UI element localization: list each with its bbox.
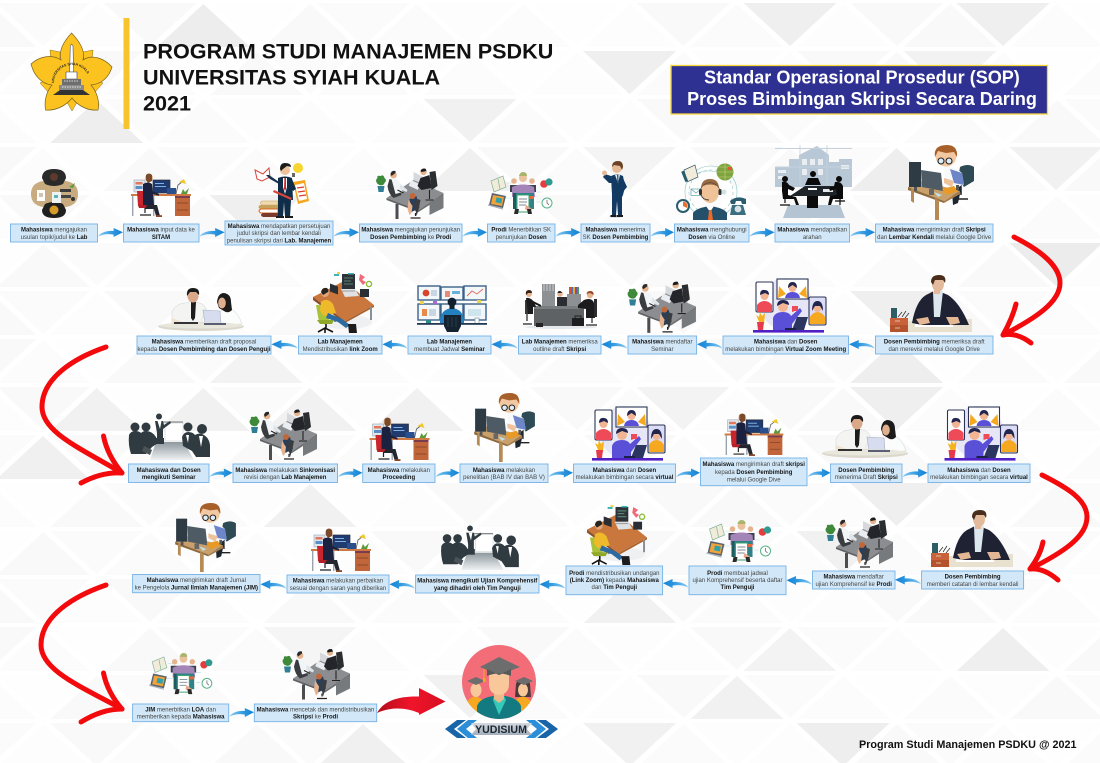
step: mengikuti seminar: Mahasiswa dan Dosen xyxy=(137,468,201,474)
step: cetak skripsi: Skripsi ke Prodi xyxy=(293,715,338,721)
step: daftar ujian: Mahasiswa mendaftar xyxy=(824,575,884,581)
arrow xyxy=(492,340,518,349)
red arrow: row 4 to row 5 xyxy=(41,585,122,722)
icon: isometric workstation xyxy=(313,272,374,333)
step: menghubungi xyxy=(674,224,749,242)
step: perbaikan: Mahasiswa melakukan perbaikan xyxy=(293,579,383,585)
step: memeriksa draft: Dosen Pembimbing memeriksa draft xyxy=(884,340,985,346)
step: sinkronisasi xyxy=(233,464,338,482)
arrow xyxy=(462,228,487,237)
icon: dosen writing xyxy=(890,275,972,332)
step: jurnal: ke Pengelola Jurnal Ilmiah Manajemen (JIM) xyxy=(135,585,258,591)
icon: student at desk xyxy=(311,528,371,572)
step: cetak skripsi xyxy=(254,704,377,722)
step: undangan: (Link Zoom) kepada Mahasiswa xyxy=(570,578,659,584)
icon: man with books xyxy=(255,163,309,218)
step: mendaftar seminar: Mahasiswa mendaftar xyxy=(632,340,692,346)
step: jadwal ujian: Tim Penguji xyxy=(721,585,755,591)
arrow xyxy=(849,340,875,349)
step: penelitian xyxy=(460,464,548,482)
icon: student at computer xyxy=(908,145,974,220)
logo: Universitas Syiah Kuala: UNIVERSITAS SYIAH KUALA xyxy=(52,62,89,83)
step: jadwal seminar xyxy=(408,336,491,354)
step: undangan xyxy=(566,566,663,595)
step: LOA: memberikan kepada Mahasiswa xyxy=(137,715,224,721)
icon: prodi document xyxy=(706,520,771,562)
step: sinkronisasi: revisi dengan Lab Manajemen xyxy=(244,475,326,481)
step: jadwal ujian xyxy=(689,566,786,595)
icon: virtual meeting xyxy=(753,278,826,333)
step: arahan xyxy=(775,224,850,242)
step: outline: Lab Manajemen memeriksa xyxy=(522,340,598,346)
arrow xyxy=(663,579,688,588)
step: menerima draft: menerima Draft Skripsi xyxy=(835,475,898,481)
step: mengajukan usulan: Mahasiswa mengajukan xyxy=(21,228,87,234)
icon: seminar silhouettes xyxy=(129,414,210,460)
step: kirim draft: dan Lembar Kendali melalui Google Drive xyxy=(877,235,991,241)
icon: virtual meeting xyxy=(592,406,665,461)
step: penelitian: Mahasiswa melakukan xyxy=(473,468,535,474)
title: PROGRAM STUDI MANAJEMEN PSDKU xyxy=(143,38,553,64)
arrow xyxy=(338,468,362,478)
step: input data: Mahasiswa input data ke xyxy=(127,228,195,234)
arrow xyxy=(334,228,359,237)
step: catatan: Dosen Pembimbing xyxy=(945,575,1001,581)
step: link zoom: Lab Manajemen xyxy=(318,340,363,346)
step: perbaikan: sesuai dengan saran yang diberikan xyxy=(290,586,386,592)
step: draft proposal: Mahasiswa memberikan draft proposal xyxy=(152,340,256,346)
step: virtual zoom: Mahasiswa dan Dosen xyxy=(754,340,817,346)
arrow xyxy=(272,340,298,349)
step: daftar ujian: ujian Komprehensif ke Prodi xyxy=(816,582,892,588)
SOP title banner: Proses Bimbingan Skripsi Secara Daring xyxy=(687,89,1037,109)
icon: seminar silhouettes xyxy=(441,525,519,570)
arrow xyxy=(697,340,722,349)
icon: prodi document xyxy=(149,653,212,694)
step: menghubungi: Mahasiswa menghubungi xyxy=(677,228,747,234)
step: perbaikan xyxy=(287,575,389,593)
step: bimbingan virtual: melakukan bimbingan secara virtual xyxy=(576,475,673,481)
step: menghubungi: Dosen via Online xyxy=(688,235,735,241)
arrow xyxy=(382,340,408,349)
step: input data: SITAM xyxy=(152,235,170,241)
icon: student at desk xyxy=(131,174,191,217)
icon: student at computer xyxy=(175,503,236,572)
step: jurnal xyxy=(133,574,260,593)
step: bimbingan virtual: Mahasiswa dan Dosen xyxy=(947,468,1011,474)
title: UNIVERSITAS SYIAH KUALA xyxy=(143,64,441,90)
icon: virtual meeting xyxy=(944,406,1018,461)
red arrow: row 1 to row 2 xyxy=(1003,237,1060,343)
step: outline xyxy=(518,336,601,354)
step: jadwal ujian: Prodi membuat jadwal xyxy=(707,571,768,577)
title: 2021 xyxy=(143,90,191,116)
arrow xyxy=(602,340,628,349)
icon: monitors xyxy=(417,286,487,332)
SOP title banner xyxy=(671,66,1048,114)
icon: lab review office xyxy=(523,284,597,329)
step: memeriksa draft xyxy=(876,336,993,354)
row 2 steps xyxy=(137,336,993,354)
arrow xyxy=(230,708,254,717)
step: mengikuti seminar xyxy=(128,464,209,482)
step: catatan: memberi catatan di lembar kendali xyxy=(927,582,1018,588)
icon: office xyxy=(250,410,317,460)
icon: isometric workstation xyxy=(587,505,647,565)
arrow xyxy=(895,576,921,584)
step: catatan xyxy=(922,571,1024,589)
big red arrow to yudisium xyxy=(377,688,446,715)
arrow xyxy=(902,468,928,478)
step: kirim draft skripsi: Mahasiswa mengirimkan draft skripsi xyxy=(702,462,805,468)
step: proceeding: Mahasiswa melakukan xyxy=(368,468,430,474)
step: SK xyxy=(488,224,555,242)
step: bimbingan virtual xyxy=(928,464,1030,482)
step: link zoom: Mendistribusikan link Zoom xyxy=(303,347,378,353)
step: daftar ujian xyxy=(812,571,895,589)
step: draft proposal xyxy=(137,336,271,354)
step: mengikuti seminar: mengikuti Seminar xyxy=(142,475,196,481)
arrow xyxy=(98,228,123,237)
step: input data xyxy=(124,224,199,242)
step: mengajukan usulan xyxy=(10,224,98,242)
step: arahan: arahan xyxy=(803,235,822,241)
step: proceeding: Proceeding xyxy=(382,475,415,481)
row 4 icons xyxy=(175,503,1013,572)
arrow xyxy=(750,228,774,237)
row 3 icons xyxy=(129,393,1018,462)
red arrow: row 2 to row 3 xyxy=(42,347,122,483)
step: kirim draft skripsi: kepada Dosen Pembimbing xyxy=(715,470,792,476)
row 2 icons xyxy=(158,272,972,333)
icon: yudisium graduates xyxy=(462,645,536,722)
step: draft proposal: kepada Dosen Pembimbing dan Dosen Penguji xyxy=(137,347,271,353)
step: arahan: Mahasiswa mendapatkan xyxy=(777,228,847,234)
arrow xyxy=(808,468,830,478)
step: link zoom xyxy=(298,336,382,354)
icon: student at desk xyxy=(370,418,430,461)
step: undangan: dan Tim Penguji xyxy=(592,585,637,591)
icon: office xyxy=(628,282,696,333)
step: menerima SK: SK Dosen Pembimbing xyxy=(583,235,648,241)
step: jadwal seminar: Lab Manajemen xyxy=(427,340,472,346)
step: mengajukan usulan: usulan topik/judul ke Lab xyxy=(21,235,87,241)
step: SK: Prodi Menerbitkan SK xyxy=(491,228,551,234)
row 3 steps xyxy=(128,458,1030,486)
icon: prodi document xyxy=(488,172,553,214)
yudisium banner xyxy=(445,720,558,738)
step: kirim draft xyxy=(876,224,993,242)
arrow xyxy=(260,580,286,589)
arrow xyxy=(676,468,700,478)
step: cetak skripsi: Mahasiswa mencetak dan mendistribusikan xyxy=(257,707,374,713)
icon: student at desk xyxy=(725,413,783,456)
step: penunjukan dosen: Dosen Pembimbing ke Prodi xyxy=(370,235,451,241)
SOP title banner: Standar Operasional Prosedur (SOP) xyxy=(704,68,1020,88)
step: jadwal ujian: ujian Komprehensif beserta daftar xyxy=(692,578,783,584)
step: ujian komprehensif xyxy=(416,575,539,593)
step: bimbingan virtual: Mahasiswa dan Dosen xyxy=(593,468,656,474)
arrow xyxy=(200,228,224,237)
icon: two people at table xyxy=(822,415,908,458)
icon: office xyxy=(826,518,893,568)
step: mendaftar seminar xyxy=(628,336,697,354)
row 5 icons xyxy=(149,649,350,700)
icon: student at computer xyxy=(474,393,535,462)
step: memeriksa draft: dan merevisi melalui Google Drive xyxy=(889,347,981,353)
row 4 steps xyxy=(133,566,1024,595)
step: menerima draft: Dosen Pembimbing xyxy=(838,468,895,474)
step: penunjukan dosen xyxy=(360,224,462,242)
row 5 steps xyxy=(133,704,377,722)
step: virtual zoom: melakukan bimbingan Virtual Zoom Meeting xyxy=(725,347,846,353)
arrow xyxy=(210,468,232,478)
footer credit: Program Studi Manajemen PSDKU @ 2021 xyxy=(859,739,1077,751)
step: menerima draft xyxy=(831,464,902,482)
step: jurnal: Mahasiswa mengirimkan draft Jurnal xyxy=(147,578,246,584)
step: virtual zoom xyxy=(723,336,848,354)
step: kirim draft skripsi xyxy=(700,458,807,486)
step: ujian komprehensif: Mahasiswa mengikuti Ujian Komprehensif xyxy=(417,579,538,585)
step: persetujuan judul: judul skripsi dan lembar kendali xyxy=(236,231,321,237)
arrow xyxy=(390,580,415,589)
header divider bar xyxy=(124,18,130,129)
step: penunjukan dosen: Mahasiswa mengajukan penunjukan xyxy=(361,228,460,234)
step: mendaftar seminar: Seminar xyxy=(651,347,673,353)
yudisium banner: YUDISIUM xyxy=(475,724,527,736)
icon: dosen writing xyxy=(931,510,1013,567)
step: kirim draft: Mahasiswa mengirimkan draft Skripsi xyxy=(883,228,986,234)
step: menerima SK xyxy=(581,224,650,242)
arrow xyxy=(556,228,580,237)
icon: office xyxy=(376,168,444,219)
step: proceeding xyxy=(363,464,435,482)
arrow xyxy=(850,228,875,237)
step: outline: outline draft Skripsi xyxy=(533,347,586,353)
arrow xyxy=(786,576,812,585)
icon: standing man xyxy=(602,161,627,218)
step: undangan: Prodi mendistribusikan undangan xyxy=(569,571,660,577)
step: persetujuan judul: penulisan skripsi dari Lab. Manajemen xyxy=(227,238,331,244)
icon: office xyxy=(282,649,350,700)
step: menerima SK: Mahasiswa menerima xyxy=(585,228,646,234)
step: LOA xyxy=(133,704,229,722)
arrow xyxy=(436,468,460,478)
red arrow: row 3 to row 4 xyxy=(1030,475,1087,580)
icon: meeting table top view xyxy=(31,169,78,218)
step: sinkronisasi: Mahasiswa melakukan Sinkronisasi xyxy=(235,468,335,474)
icon: call center xyxy=(676,164,746,220)
step: kirim draft skripsi: melalui Google Dive xyxy=(727,478,781,484)
logo: Universitas Syiah Kuala xyxy=(30,32,112,111)
icon: two people at table xyxy=(158,288,244,331)
icon: city meeting silhouette xyxy=(775,145,852,218)
step: bimbingan virtual xyxy=(574,464,676,482)
step: ujian komprehensif: yang dihadiri oleh Tim Penguji xyxy=(434,586,521,592)
row 1 steps xyxy=(10,221,993,245)
step: LOA: JIM menerbitkan LOA dan xyxy=(145,707,216,713)
arrow xyxy=(548,468,573,478)
step: penelitian: penelitian (BAB IV dan BAB V) xyxy=(463,475,545,481)
step: persetujuan judul xyxy=(225,221,333,245)
step: bimbingan virtual: melakukan bimbingan secara virtual xyxy=(930,475,1028,481)
step: SK: penunjukan Dosen xyxy=(496,235,547,241)
row 1 icons xyxy=(31,145,974,220)
arrow xyxy=(540,580,566,589)
step: jadwal seminar: membuat Jadwal Seminar xyxy=(414,347,485,353)
arrow xyxy=(650,228,674,237)
step: persetujuan judul: Mahasiswa mendapatkan persetujuan xyxy=(228,224,330,230)
